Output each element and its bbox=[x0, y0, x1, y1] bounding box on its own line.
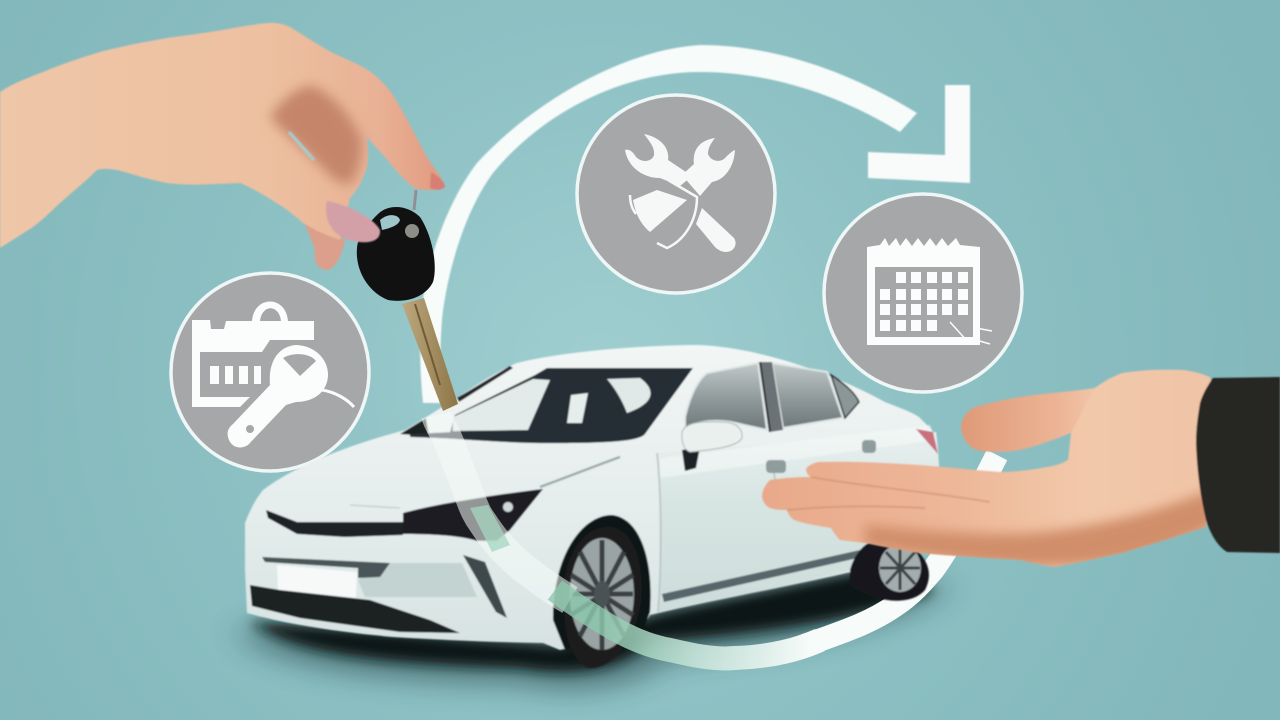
rear side window bbox=[772, 363, 843, 428]
right hand bbox=[762, 370, 1280, 567]
ring lower right segment bbox=[806, 455, 997, 645]
car key bbox=[357, 190, 458, 411]
arrowhead bbox=[868, 85, 970, 183]
rear wheel bbox=[850, 536, 929, 601]
icon: tools and shield circle bbox=[577, 95, 775, 293]
door lines bbox=[657, 453, 778, 612]
translucent ring over car bbox=[436, 415, 570, 600]
shoulder highlight bbox=[660, 425, 936, 478]
door handles bbox=[766, 460, 786, 473]
upper intake bbox=[262, 557, 390, 578]
icon: calendar circle bbox=[824, 194, 1022, 392]
mirror bbox=[682, 447, 700, 471]
car ground shadow bbox=[232, 570, 955, 689]
lower grille bbox=[250, 585, 460, 633]
windshield reflection bbox=[453, 379, 550, 431]
finger gap bbox=[289, 132, 314, 160]
rear quarter window bbox=[831, 375, 859, 418]
key fob bbox=[357, 207, 435, 301]
front side window bbox=[685, 363, 767, 430]
key blades bbox=[402, 298, 458, 411]
rocker strip bbox=[662, 550, 862, 602]
A pillar trim bbox=[457, 366, 513, 402]
front wheel arch bbox=[553, 515, 651, 650]
license plate bbox=[277, 565, 357, 598]
windshield bbox=[410, 368, 693, 443]
front wheel bbox=[564, 527, 642, 668]
door side panel bbox=[657, 432, 939, 612]
car bbox=[245, 345, 939, 668]
hand interior shadow bbox=[270, 85, 362, 185]
suit sleeve bbox=[1196, 377, 1280, 553]
lower panel bbox=[358, 563, 477, 597]
bumper vent bbox=[463, 555, 507, 618]
cowl vent bbox=[400, 418, 429, 436]
palm and fingers bbox=[0, 23, 445, 248]
car body bbox=[245, 345, 939, 650]
green glass patch over headlight bbox=[470, 505, 510, 552]
front grille strip bbox=[266, 510, 403, 537]
palm and fingers bbox=[762, 370, 1215, 567]
thumb bbox=[961, 378, 1110, 452]
circular arrow ring bbox=[420, 45, 970, 403]
headlight bbox=[403, 489, 543, 541]
key ring bbox=[414, 190, 416, 210]
middle finger bbox=[303, 220, 345, 270]
hood crease bbox=[540, 457, 620, 487]
ring over wheel and lower arc bbox=[555, 590, 820, 658]
finger creases bbox=[787, 477, 990, 510]
door pillar bbox=[760, 362, 783, 432]
tail light bbox=[916, 429, 938, 454]
thumb nail bbox=[326, 201, 380, 242]
palm shading bbox=[865, 490, 1215, 566]
icon: calendar and key circle bbox=[171, 273, 369, 471]
index nail bbox=[430, 172, 445, 190]
left hand bbox=[0, 23, 445, 270]
